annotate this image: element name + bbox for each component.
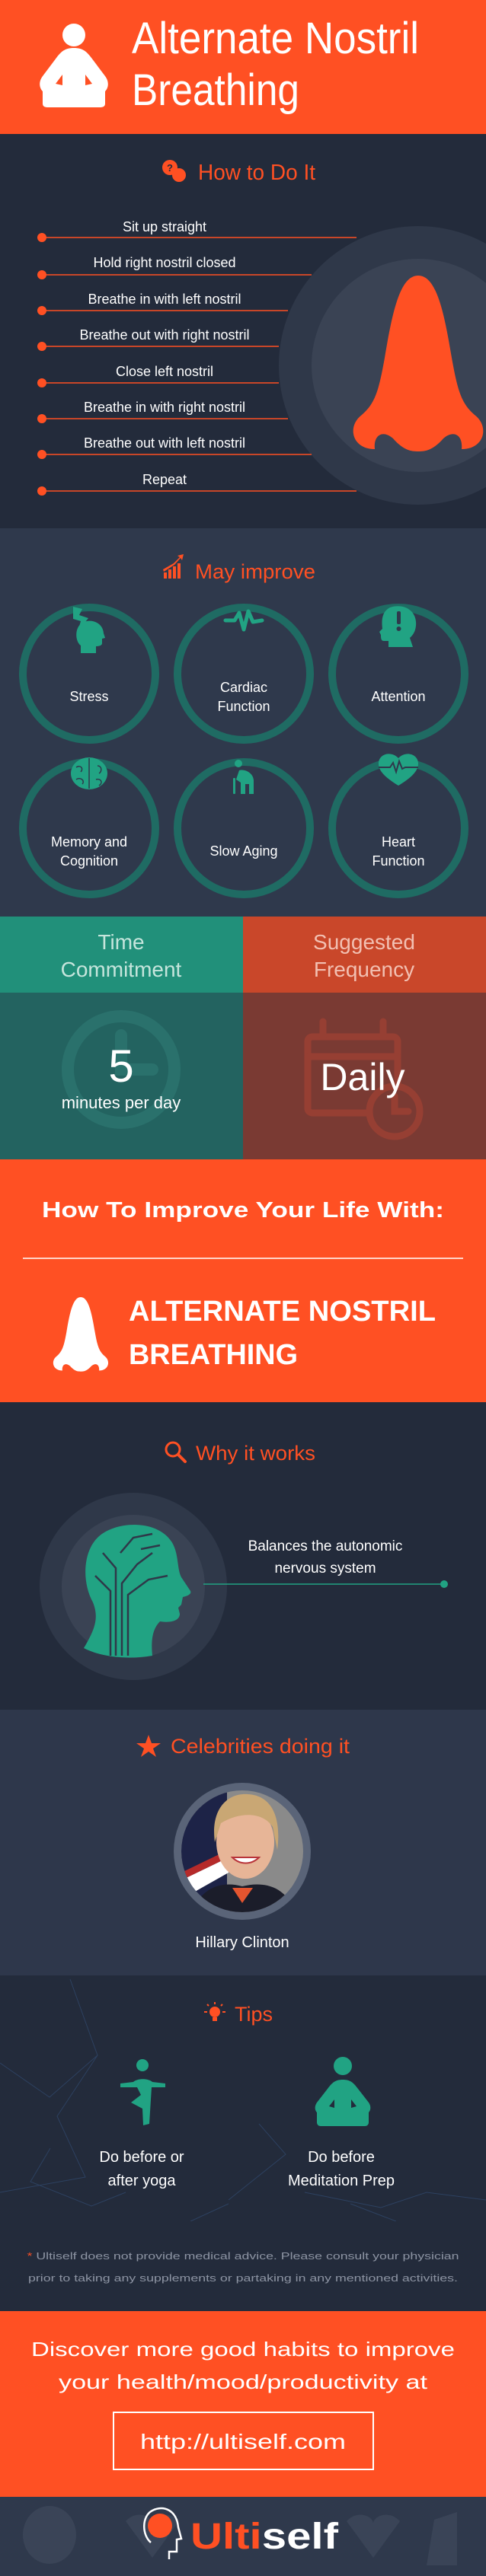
- title: Alternate Nostril: [132, 14, 419, 63]
- benefit labels: Memory and: [51, 834, 127, 850]
- benefit labels: Stress: [69, 689, 109, 704]
- header section: [0, 0, 486, 134]
- banner title: BREATHING: [129, 1339, 298, 1371]
- photo: hillary clinton: [174, 1783, 311, 1920]
- steps list: Breathe out with left nostril: [84, 435, 245, 451]
- tip labels: Do before or: [99, 2149, 184, 2166]
- icon: meditation: [315, 2057, 370, 2126]
- tip labels: Meditation Prep: [288, 2173, 395, 2189]
- heading: how to do it: ?: [167, 162, 173, 174]
- tip labels: Do before: [308, 2149, 375, 2166]
- heading: time commitment: Commitment: [61, 958, 182, 981]
- panel: call to action: [0, 2311, 486, 2497]
- steps list: [37, 219, 357, 496]
- panel: call to action: your health/mood/productivity at: [59, 2370, 428, 2393]
- icon: faint clock: [68, 1016, 174, 1123]
- benefit labels: [51, 680, 426, 869]
- benefit labels: Function: [217, 699, 270, 714]
- panel: celebrities: [0, 1710, 486, 1975]
- steps list: Breathe in with right nostril: [84, 400, 245, 415]
- heading: suggested frequency: [313, 930, 415, 981]
- value: daily: Daily: [320, 1056, 405, 1098]
- icon: circuit head: [40, 1493, 227, 1680]
- benefit labels: Cognition: [60, 853, 118, 869]
- benefit labels: Slow Aging: [209, 843, 278, 859]
- value: 5 minutes per day: minutes per day: [62, 1093, 181, 1112]
- benefit labels: Function: [372, 853, 425, 869]
- value: 5 minutes per day: [62, 1041, 181, 1112]
- steps list: Hold right nostril closed: [93, 255, 236, 270]
- steps list: Sit up straight: [123, 219, 206, 234]
- panel: suggested frequency: [243, 917, 486, 1159]
- heading: may improve: May improve: [195, 560, 315, 583]
- title: Breathing: [132, 65, 299, 115]
- panel: how to do it: [0, 134, 486, 528]
- banner title: [129, 1296, 436, 1371]
- value: 5 minutes per day: 5: [108, 1041, 134, 1092]
- disclaimer: * Ultiself does not provide medical advice. Please consult your physician: [27, 2250, 459, 2262]
- icon: stress head: [73, 607, 105, 653]
- heading: how to do it: How to Do It: [198, 161, 315, 185]
- icon: cardiac pulse: [225, 611, 262, 630]
- disclaimer: [0, 2221, 486, 2311]
- benefit labels: Attention: [371, 689, 426, 704]
- panel: call to action: Discover more good habits to improve: [31, 2338, 455, 2361]
- banner title: ALTERNATE NOSTRIL: [129, 1296, 436, 1328]
- panel: time commitment: [0, 917, 243, 1159]
- heading: time commitment: Time: [98, 930, 145, 954]
- benefit circles: [23, 607, 465, 894]
- heading: suggested frequency: Frequency: [314, 958, 414, 981]
- icon: brain: [71, 757, 107, 789]
- tip labels: [99, 2149, 395, 2189]
- url button: [114, 2412, 373, 2469]
- heading: tips: [204, 2002, 273, 2026]
- icon: elderly person: [233, 760, 254, 794]
- tip labels: after yoga: [108, 2173, 176, 2189]
- nose illustration: [279, 226, 486, 505]
- icon: attention head: [379, 606, 416, 647]
- steps list: Close left nostril: [116, 364, 213, 379]
- panel: how to improve banner: [0, 1159, 486, 1402]
- panel: may improve: [0, 528, 486, 917]
- heading: may improve: [163, 554, 315, 583]
- callout: balances the autonomic nervous system: nervous system: [274, 1561, 376, 1577]
- heading: time commitment: [61, 930, 182, 981]
- panel: celebrities: Hillary Clinton: [195, 1934, 289, 1951]
- benefit labels: Cardiac: [220, 680, 267, 695]
- steps list: Repeat: [142, 472, 187, 487]
- heading: celebrities doing it: Celebrities doing it: [171, 1735, 350, 1758]
- callout: balances the autonomic nervous system: Balances the autonomic: [248, 1538, 402, 1554]
- benefit labels: Heart: [382, 834, 415, 850]
- footer logo: [0, 2497, 486, 2576]
- icon: meditation figure: [40, 24, 108, 107]
- title: [132, 14, 419, 115]
- banner heading: How To Improve Your Life With:: [42, 1198, 444, 1223]
- steps list: Breathe out with right nostril: [79, 327, 250, 343]
- callout: balances the autonomic nervous system: [203, 1538, 448, 1588]
- heading: suggested frequency: Suggested: [313, 930, 415, 954]
- icon: yoga tree pose: [120, 2059, 165, 2125]
- icon: white nose: [53, 1297, 108, 1372]
- url button: http://ultiself.com: [140, 2430, 346, 2453]
- icon: faint calendar: [308, 1022, 420, 1137]
- heading: tips: Tips: [235, 2003, 273, 2026]
- steps list: Breathe in with left nostril: [88, 292, 241, 307]
- logo icon: [144, 2508, 181, 2559]
- icon: heart with pulse: [379, 754, 418, 786]
- footer logo: Ulti self: [190, 2517, 339, 2557]
- disclaimer: prior to taking any supplements or partaking in any mentioned activities.: [28, 2272, 458, 2284]
- panel: tips: [0, 1975, 486, 2221]
- panel: why it works: [0, 1402, 486, 1710]
- heading: why it works: Why it works: [196, 1442, 315, 1465]
